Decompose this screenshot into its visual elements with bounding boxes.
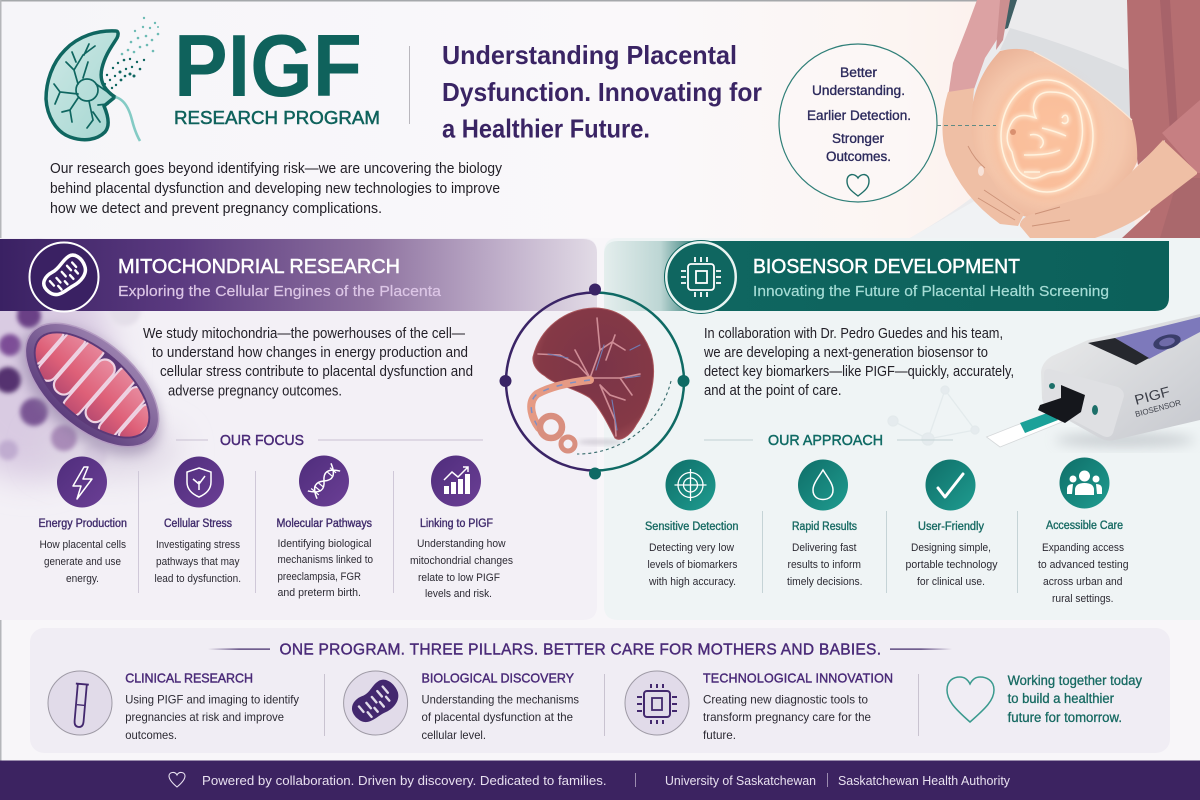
focus item: linking to PIGF: relate to low PIGF xyxy=(418,572,500,584)
callout circle: key outcomes: Outcomes. xyxy=(826,149,891,164)
pillar: clinical research: pregnancies at risk and improve xyxy=(125,710,284,724)
callout circle: key outcomes: Better xyxy=(840,65,878,80)
panel: biosensor development xyxy=(604,238,1200,620)
illustration: placenta xyxy=(531,308,654,451)
pillar: technological innovation: Creating new diagnostic tools to xyxy=(703,692,868,706)
center ring with placenta illustration xyxy=(500,284,690,480)
illustration: PIGF biosensor device: BIOSENSOR xyxy=(1134,398,1182,419)
focus item: energy production: Energy Production xyxy=(38,518,127,530)
logo subtitle: research program: RESEARCH PROGRAM xyxy=(174,108,380,128)
heading: our focus: OUR FOCUS xyxy=(220,432,304,449)
subheading: Exploring the Cellular Engines of the Placenta xyxy=(118,283,442,300)
pillar: technological innovation: transform pregnancy care for the xyxy=(703,710,871,724)
approach item: sensitive detection: levels of biomarkers xyxy=(648,559,738,571)
heading: mitochondrial research: MITOCHONDRIAL RESEARCH xyxy=(118,256,400,278)
pillar: biological discovery: Understanding the mechanisms xyxy=(422,692,579,706)
focus item: cellular stress xyxy=(154,456,241,585)
intro text xyxy=(50,161,503,217)
body text: We study mitochondria—the powerhouses of the cell— xyxy=(143,326,465,342)
body text xyxy=(143,326,473,400)
body text: and at the point of care. xyxy=(704,383,842,399)
icon: heart xyxy=(847,175,869,196)
icon: mitochondrion badge xyxy=(30,242,98,312)
focus item: cellular stress: pathways that may xyxy=(156,556,240,568)
body text: cellular stress contribute to placental dysfunction and xyxy=(160,364,473,380)
approach item: rapid results xyxy=(787,460,862,588)
footer bar: Saskatchewan Health Authority xyxy=(838,773,1010,788)
logo wordmark: PIGF: PIGF xyxy=(174,16,362,115)
pillar: technological innovation: TECHNOLOGICAL INNOVATION xyxy=(703,672,893,686)
approach item: sensitive detection xyxy=(645,460,738,588)
pillar: clinical research: CLINICAL RESEARCH xyxy=(125,672,253,686)
closing message with heart: Working together today xyxy=(1008,673,1142,688)
focus item: energy production: generate and use xyxy=(44,556,121,568)
approach item: user-friendly xyxy=(906,460,998,588)
approach item: accessible care: Expanding access xyxy=(1042,542,1124,554)
body text: adverse pregnancy outcomes. xyxy=(168,384,342,400)
focus item: energy production: How placental cells xyxy=(40,539,126,551)
focus item: molecular pathways: Identifying biological xyxy=(278,538,372,550)
footer bar xyxy=(0,760,1200,800)
focus item: molecular pathways: preeclampsia, FGR xyxy=(278,571,361,583)
faint molecule network xyxy=(888,386,979,445)
focus item: linking to PIGF: mitochondrial changes xyxy=(410,555,513,567)
body text: to understand how changes in energy production and xyxy=(152,345,468,361)
focus item: linking to PIGF xyxy=(410,456,513,600)
focus item: linking to PIGF: Linking to PIGF xyxy=(420,518,493,530)
pillar: biological discovery: cellular level. xyxy=(422,728,486,742)
closing message with heart xyxy=(947,673,1142,725)
pillar: clinical research xyxy=(48,671,299,742)
approach item: accessible care xyxy=(1038,458,1128,605)
pillar: technological innovation: future. xyxy=(703,728,736,742)
approach item: sensitive detection: Sensitive Detection xyxy=(645,521,738,533)
band: header xyxy=(604,241,1169,311)
band: header xyxy=(0,239,597,311)
pillar: biological discovery: BIOLOGICAL DISCOVERY xyxy=(422,672,575,686)
focus item: energy production xyxy=(38,456,127,585)
illustration: mitochondrion and cell background xyxy=(0,242,185,480)
illustration: PIGF biosensor device xyxy=(986,314,1200,447)
approach item: sensitive detection: with high accuracy. xyxy=(648,576,736,588)
subheading: Innovating the Future of Placental Health Screening xyxy=(753,283,1109,300)
tagline heading xyxy=(442,40,762,144)
approach item: accessible care: Accessible Care xyxy=(1046,520,1123,532)
approach item: rapid results: timely decisions. xyxy=(787,576,862,588)
heading: biosensor development: BIOSENSOR DEVELOPMENT xyxy=(753,256,1020,278)
approach item: accessible care: rural settings. xyxy=(1052,593,1114,605)
focus item: cellular stress: Investigating stress xyxy=(156,539,240,551)
logo: placenta mark xyxy=(46,17,159,141)
approach item: rapid results: Rapid Results xyxy=(792,521,857,533)
body text: we are developing a next-generation biosensor to xyxy=(703,345,988,361)
closing message with heart: future for tomorrow. xyxy=(1008,710,1122,725)
tagline heading: a Healthier Future. xyxy=(442,114,650,144)
intro text: how we detect and prevent pregnancy complications. xyxy=(50,201,382,217)
photo: pregnant belly with glowing fetus xyxy=(910,0,1200,238)
focus item: linking to PIGF: levels and risk. xyxy=(425,588,492,600)
pillar: biological discovery: of placental dysfunction at the xyxy=(422,710,573,724)
focus item: molecular pathways: mechanisms linked to xyxy=(278,554,373,566)
focus item: energy production: energy. xyxy=(66,573,99,585)
pillar: clinical research: outcomes. xyxy=(125,728,177,742)
footer bar: University of Saskatchewan xyxy=(665,773,816,788)
icon: footer heart xyxy=(169,772,185,787)
approach item: rapid results: Delivering fast xyxy=(792,542,856,554)
footer bar: Powered by collaboration. Driven by discovery. Dedicated to families. xyxy=(202,773,606,788)
focus item: molecular pathways: Molecular Pathways xyxy=(276,518,372,530)
focus item: linking to PIGF: Understanding how xyxy=(417,538,506,550)
callout circle: key outcomes: Understanding. xyxy=(812,83,905,98)
callout circle: key outcomes xyxy=(779,44,996,202)
callout circle: key outcomes: Stronger xyxy=(832,131,885,146)
tagline heading: Understanding Placental xyxy=(442,40,737,70)
icon: chip badge xyxy=(664,240,738,314)
callout circle: key outcomes: Earlier Detection. xyxy=(807,108,911,123)
heading: our approach: OUR APPROACH xyxy=(768,432,883,449)
approach item: user-friendly: portable technology xyxy=(906,559,998,571)
header divider xyxy=(409,46,410,124)
approach item: accessible care: across urban and xyxy=(1043,576,1122,588)
pillar: clinical research: Using PIGF and imaging to identify xyxy=(125,692,299,706)
approach item: user-friendly: User-Friendly xyxy=(918,521,984,533)
body text: detect key biomarkers—like PIGF—quickly, accurately, xyxy=(704,364,1014,380)
heading: three pillars: ONE PROGRAM. THREE PILLARS. BETTER CARE FOR MOTHERS AND BABIES. xyxy=(280,642,881,659)
tagline heading: Dysfunction. Innovating for xyxy=(442,77,762,107)
pillar: technological innovation xyxy=(625,671,893,742)
closing message with heart: to build a healthier xyxy=(1008,691,1114,706)
pillar: biological discovery xyxy=(344,671,579,742)
body text: In collaboration with Dr. Pedro Guedes and his team, xyxy=(704,326,1003,342)
panel: mitochondrial research xyxy=(0,238,597,620)
approach item: user-friendly: Designing simple, xyxy=(911,542,991,554)
approach item: rapid results: results to inform xyxy=(788,559,861,571)
illustration: PIGF biosensor device: PIGF xyxy=(1133,383,1172,408)
approach item: accessible care: to advanced testing xyxy=(1038,559,1128,571)
intro text: behind placental dysfunction and developing new technologies to improve xyxy=(50,181,500,197)
focus item: cellular stress: lead to dysfunction. xyxy=(154,573,241,585)
panel: three pillars xyxy=(30,628,1170,753)
focus item: cellular stress: Cellular Stress xyxy=(164,518,232,530)
focus item: molecular pathways: and preterm birth. xyxy=(278,587,361,599)
focus item: molecular pathways xyxy=(276,456,373,599)
approach item: user-friendly: for clinical use. xyxy=(917,576,985,588)
body text xyxy=(703,326,1014,399)
intro text: Our research goes beyond identifying risk—we are uncovering the biology xyxy=(50,161,503,177)
approach item: sensitive detection: Detecting very low xyxy=(649,542,734,554)
